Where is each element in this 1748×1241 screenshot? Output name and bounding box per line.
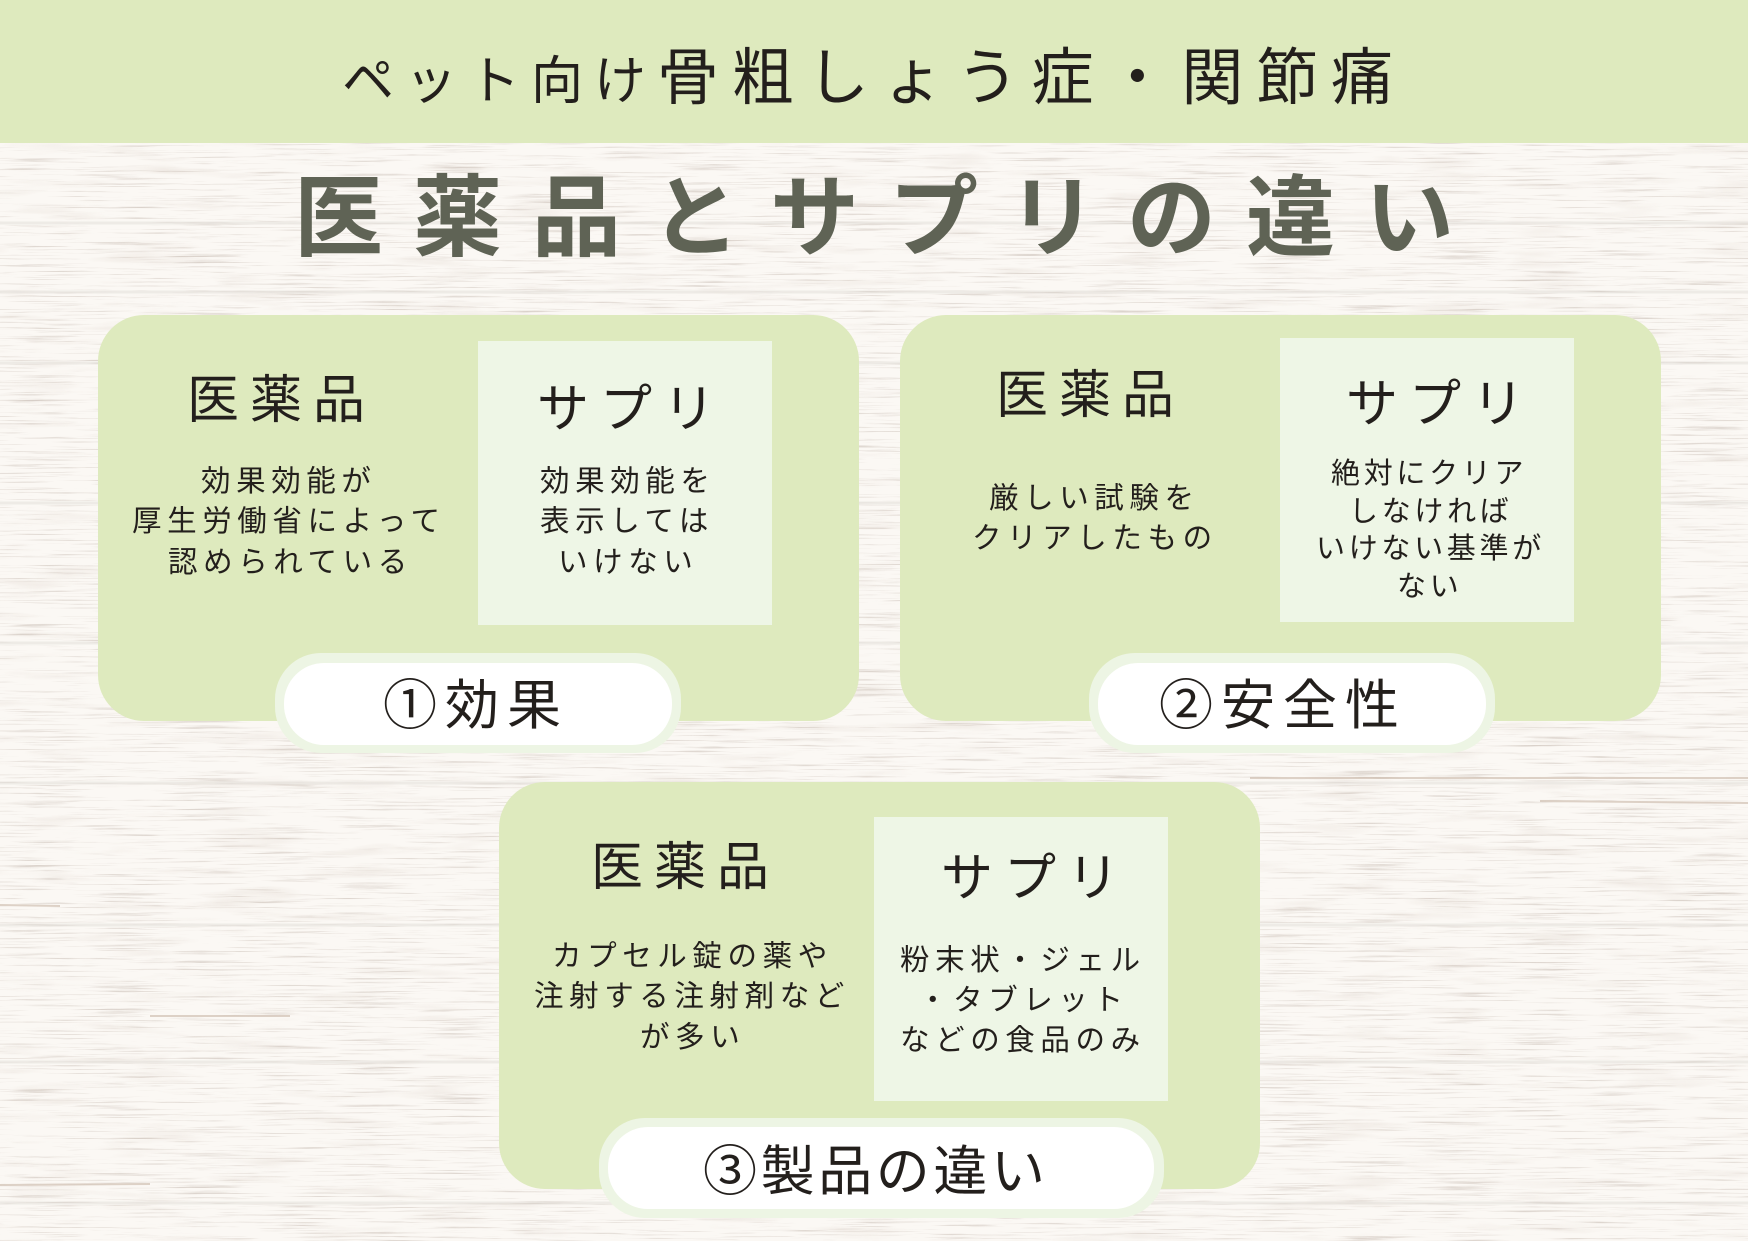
pill: product difference: ③製品の違い	[703, 1142, 1049, 1202]
supplement heading 1: サプリ	[537, 381, 726, 439]
medicine heading 3: 医薬品	[591, 839, 780, 897]
medicine text 1: 認められている	[168, 546, 413, 579]
supplement text 3	[900, 944, 1146, 1057]
panel 1: effect	[98, 315, 859, 753]
medicine text 1: 厚生労働省によって	[132, 505, 446, 538]
pill: effect	[275, 653, 681, 753]
supplement text 3: 粉末状・ジェル	[900, 944, 1146, 977]
supplement text 1: 効果効能を	[540, 465, 716, 498]
supplement text 2: ない	[1397, 571, 1462, 603]
pill: product difference	[599, 1118, 1164, 1218]
medicine text 3: 注射する注射剤など	[534, 980, 850, 1013]
pill: effect: ①効果	[383, 676, 569, 736]
main heading: 医薬品とサプリの違い	[294, 168, 1484, 268]
supplement text 1	[540, 465, 716, 579]
supplement box 3	[874, 817, 1168, 1101]
medicine text 3: カプセル錠の薬や	[552, 940, 833, 973]
medicine heading 1: 医薬品	[187, 372, 376, 430]
medicine text 2: 厳しい試験を	[989, 482, 1200, 515]
pill: safety: ②安全性	[1159, 676, 1407, 736]
medicine text 1	[132, 465, 446, 579]
supplement text 1: いけない	[558, 546, 698, 579]
panel 3: product difference	[499, 782, 1260, 1218]
supplement heading 2: サプリ	[1346, 376, 1535, 434]
medicine text 2	[972, 482, 1218, 555]
supplement text 3: などの食品のみ	[900, 1024, 1146, 1057]
supplement text 3: ・タブレット	[918, 984, 1129, 1017]
medicine heading 2: 医薬品	[996, 367, 1185, 425]
supplement text 2: 絶対にクリア	[1331, 457, 1527, 490]
supplement text 2: いけない基準が	[1316, 532, 1545, 565]
supplement text 2	[1316, 457, 1545, 603]
panel 2: safety	[900, 315, 1661, 753]
supplement text 2: しなければ	[1349, 496, 1513, 528]
medicine text 2: クリアしたもの	[972, 522, 1218, 555]
header band	[0, 0, 1748, 143]
supplement box 2	[1280, 338, 1574, 622]
medicine text 1: 効果効能が	[201, 465, 377, 498]
pill: safety	[1089, 653, 1495, 753]
medicine text 3: が多い	[640, 1021, 745, 1054]
header title: ペット向け骨粗しょう症・関節痛	[342, 44, 1406, 113]
supplement heading 3: サプリ	[941, 850, 1130, 908]
medicine text 3	[534, 940, 850, 1054]
supplement text 1: 表示しては	[540, 505, 714, 538]
supplement box 1	[478, 341, 772, 625]
